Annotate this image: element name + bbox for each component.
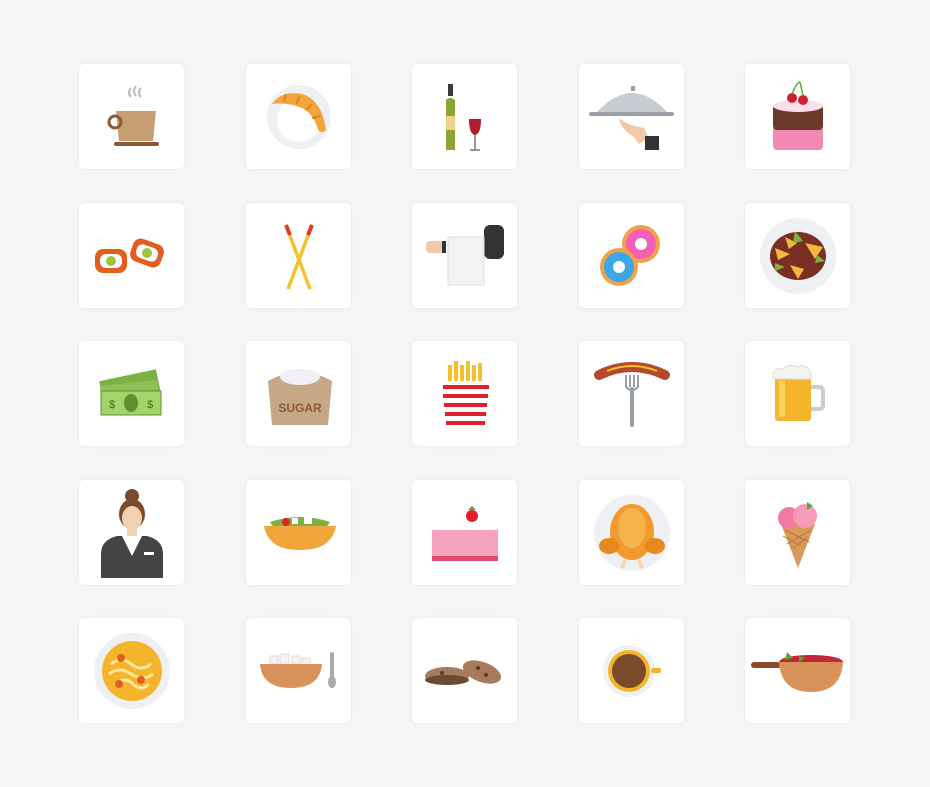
tile: wine <box>411 63 518 170</box>
tile: waitress <box>78 479 185 586</box>
tile: sushi rolls <box>78 202 185 309</box>
tile: chopsticks <box>245 202 352 309</box>
tile: coffee cup <box>78 63 185 170</box>
tile: sausage fork <box>578 340 685 447</box>
tile: cherry cake <box>744 63 851 170</box>
tile: sugar bowl <box>245 617 352 724</box>
tile: sauce pan <box>744 617 851 724</box>
tile: donuts <box>578 202 685 309</box>
tile: money: $ <box>147 399 153 411</box>
tile: salad bowl <box>245 479 352 586</box>
tile: cookies <box>411 617 518 724</box>
tile: croissant <box>245 63 352 170</box>
tile: plated dish <box>744 202 851 309</box>
tile: cake slice <box>411 479 518 586</box>
tile: noodle soup <box>78 617 185 724</box>
tile: coffee top <box>578 617 685 724</box>
tile: beer mug <box>744 340 851 447</box>
tile: money <box>78 340 185 447</box>
tile: sugar sack: SUGAR <box>278 401 322 415</box>
tile: roast chicken <box>578 479 685 586</box>
tile: ice cream <box>744 479 851 586</box>
tile: money: $ <box>109 399 115 411</box>
tile: fries <box>411 340 518 447</box>
tile: waiter arm towel <box>411 202 518 309</box>
tile: sugar sack <box>245 340 352 447</box>
tile: cloche tray <box>578 63 685 170</box>
